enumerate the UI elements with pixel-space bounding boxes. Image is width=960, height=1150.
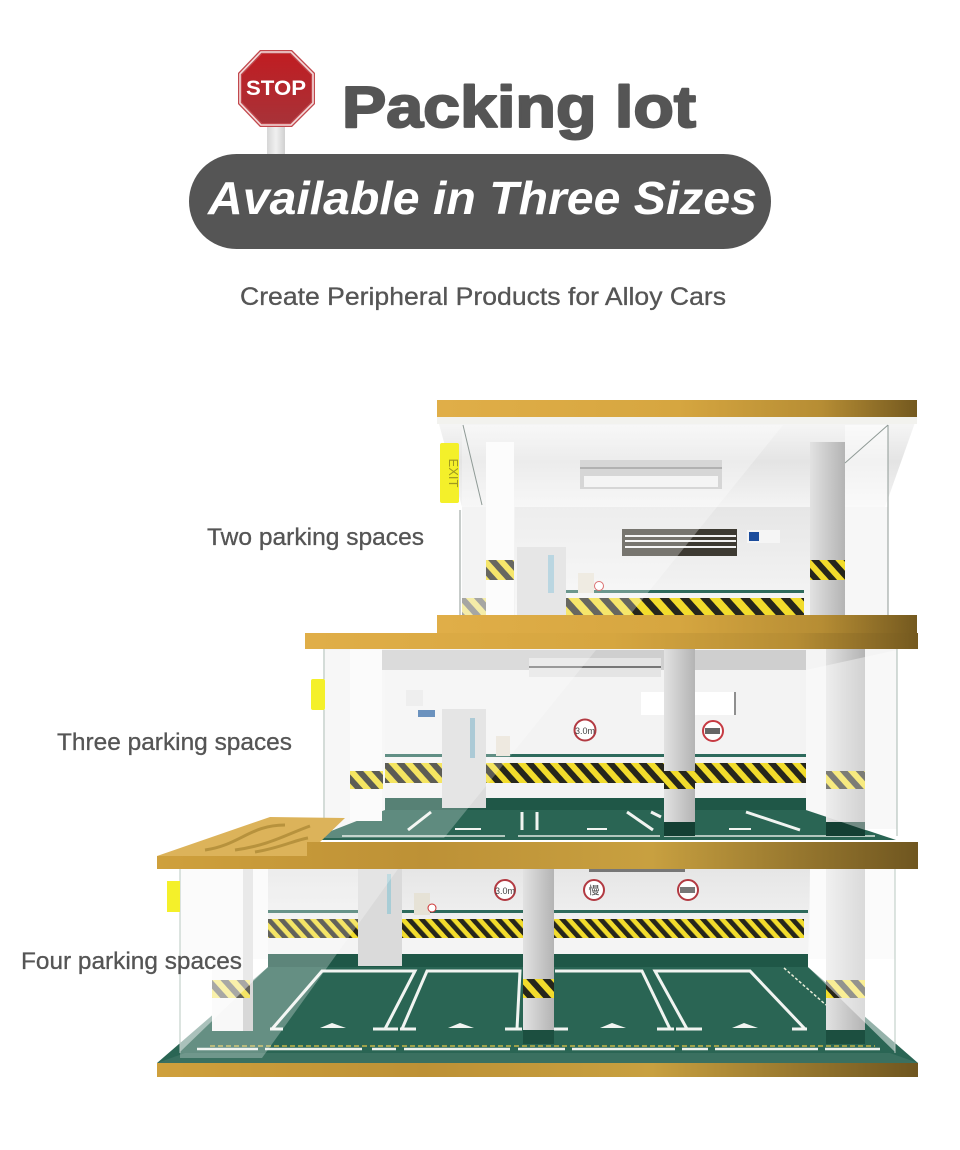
glass glare <box>325 650 596 838</box>
ceiling light <box>529 658 661 677</box>
parking arrows <box>455 828 751 830</box>
signs <box>495 880 698 900</box>
glass glare <box>180 869 398 1058</box>
icon: stop sign: STOP <box>246 77 306 100</box>
columns <box>486 442 514 615</box>
wall signs: 3.0m <box>575 726 595 736</box>
rear ceiling and wall <box>325 649 897 829</box>
panel: two parking spaces model <box>437 400 917 633</box>
columns <box>212 869 253 1031</box>
panel: four parking spaces model: 慢 <box>588 884 600 897</box>
vent <box>622 529 737 556</box>
base plank <box>157 1063 918 1077</box>
panel: four parking spaces model: 3.0m <box>495 886 515 896</box>
green skirt and floor <box>268 954 808 968</box>
wall hazard stripe <box>385 763 806 783</box>
label: two parking spaces: Two parking spaces <box>207 524 424 551</box>
door <box>442 709 486 808</box>
wall signs <box>406 690 736 756</box>
front edge dashes <box>197 1048 880 1050</box>
icon: stop sign <box>238 50 315 157</box>
back wall <box>180 869 895 959</box>
parking lines <box>270 971 807 1029</box>
exit tag <box>167 881 180 912</box>
top plank <box>305 633 918 649</box>
door <box>517 547 566 615</box>
label: four parking spaces: Four parking spaces <box>21 948 242 975</box>
title: Packing lot <box>342 75 696 140</box>
exit tag <box>311 679 325 710</box>
exit tag <box>440 443 461 503</box>
label: three parking spaces: Three parking spaces <box>57 729 292 756</box>
banner text: Available in Three Sizes <box>207 172 757 224</box>
parking arrows <box>320 1023 758 1028</box>
top plank <box>437 400 917 417</box>
panel: four parking spaces model <box>157 869 918 1077</box>
blue sign <box>747 530 780 543</box>
wood platform plank <box>157 817 918 869</box>
wall hazard stripe <box>268 919 804 938</box>
ceiling <box>437 417 917 507</box>
exit tag: EXIT <box>446 459 461 488</box>
glass glare <box>462 425 783 615</box>
subtitle: Create Peripheral Products for Alloy Cars <box>240 283 726 311</box>
parking lines <box>408 812 800 830</box>
banner pill <box>189 154 771 249</box>
columns <box>350 649 382 821</box>
green skirt and floor <box>385 798 806 811</box>
panel: three parking spaces model <box>305 633 918 840</box>
ceiling light <box>580 460 722 489</box>
bottom plank <box>437 615 917 633</box>
door <box>358 869 402 966</box>
back wall <box>462 507 888 615</box>
wall hazard stripe <box>566 598 804 615</box>
